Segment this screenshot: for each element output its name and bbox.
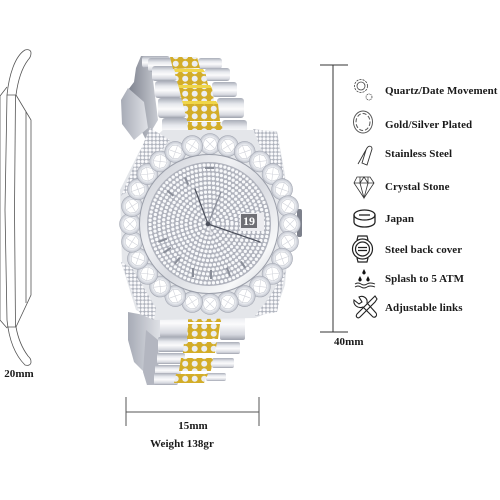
label: 15mm: 15mm (178, 420, 208, 432)
diamond bezel ring (119, 133, 301, 315)
icon: blade (358, 146, 372, 165)
bracelet: bottom (128, 305, 245, 385)
date window (240, 213, 264, 231)
date window: 19 (243, 214, 255, 228)
text: Splash to 5 ATM: Splash to 5 ATM (385, 273, 465, 285)
text: Gold/Silver Plated: Gold/Silver Plated (385, 119, 472, 131)
text: Japan: Japan (385, 213, 414, 225)
bracelet: top (121, 56, 247, 142)
icon: tools (354, 296, 377, 318)
pave dial (147, 162, 271, 286)
text: Stainless Steel: Stainless Steel (385, 148, 452, 160)
text: Crystal Stone: Crystal Stone (385, 181, 450, 193)
case and lugs (120, 130, 290, 320)
polished rim (140, 154, 278, 294)
side profile drawing (0, 50, 31, 365)
icon: water splash (355, 269, 375, 288)
label: 40mm: 40mm (334, 336, 364, 348)
width dimension line (126, 397, 259, 426)
watch hands (195, 189, 260, 242)
label: 20mm: 20mm (4, 368, 34, 380)
icon: gears (354, 80, 372, 100)
text: Adjustable links: Adjustable links (385, 302, 463, 314)
text: Quartz/Date Movement: Quartz/Date Movement (385, 85, 498, 97)
height dimension line (320, 65, 348, 332)
icon: crystal (354, 177, 374, 198)
roman numerals on dial (158, 167, 246, 279)
icon: japan disc (354, 210, 375, 227)
icon: steel back cover (352, 236, 372, 262)
label: weight: Weight 138gr (150, 438, 214, 450)
icon: plated ring (354, 111, 372, 133)
text: Steel back cover: Steel back cover (385, 244, 462, 256)
watch illustration (119, 56, 302, 385)
crown (297, 209, 302, 237)
